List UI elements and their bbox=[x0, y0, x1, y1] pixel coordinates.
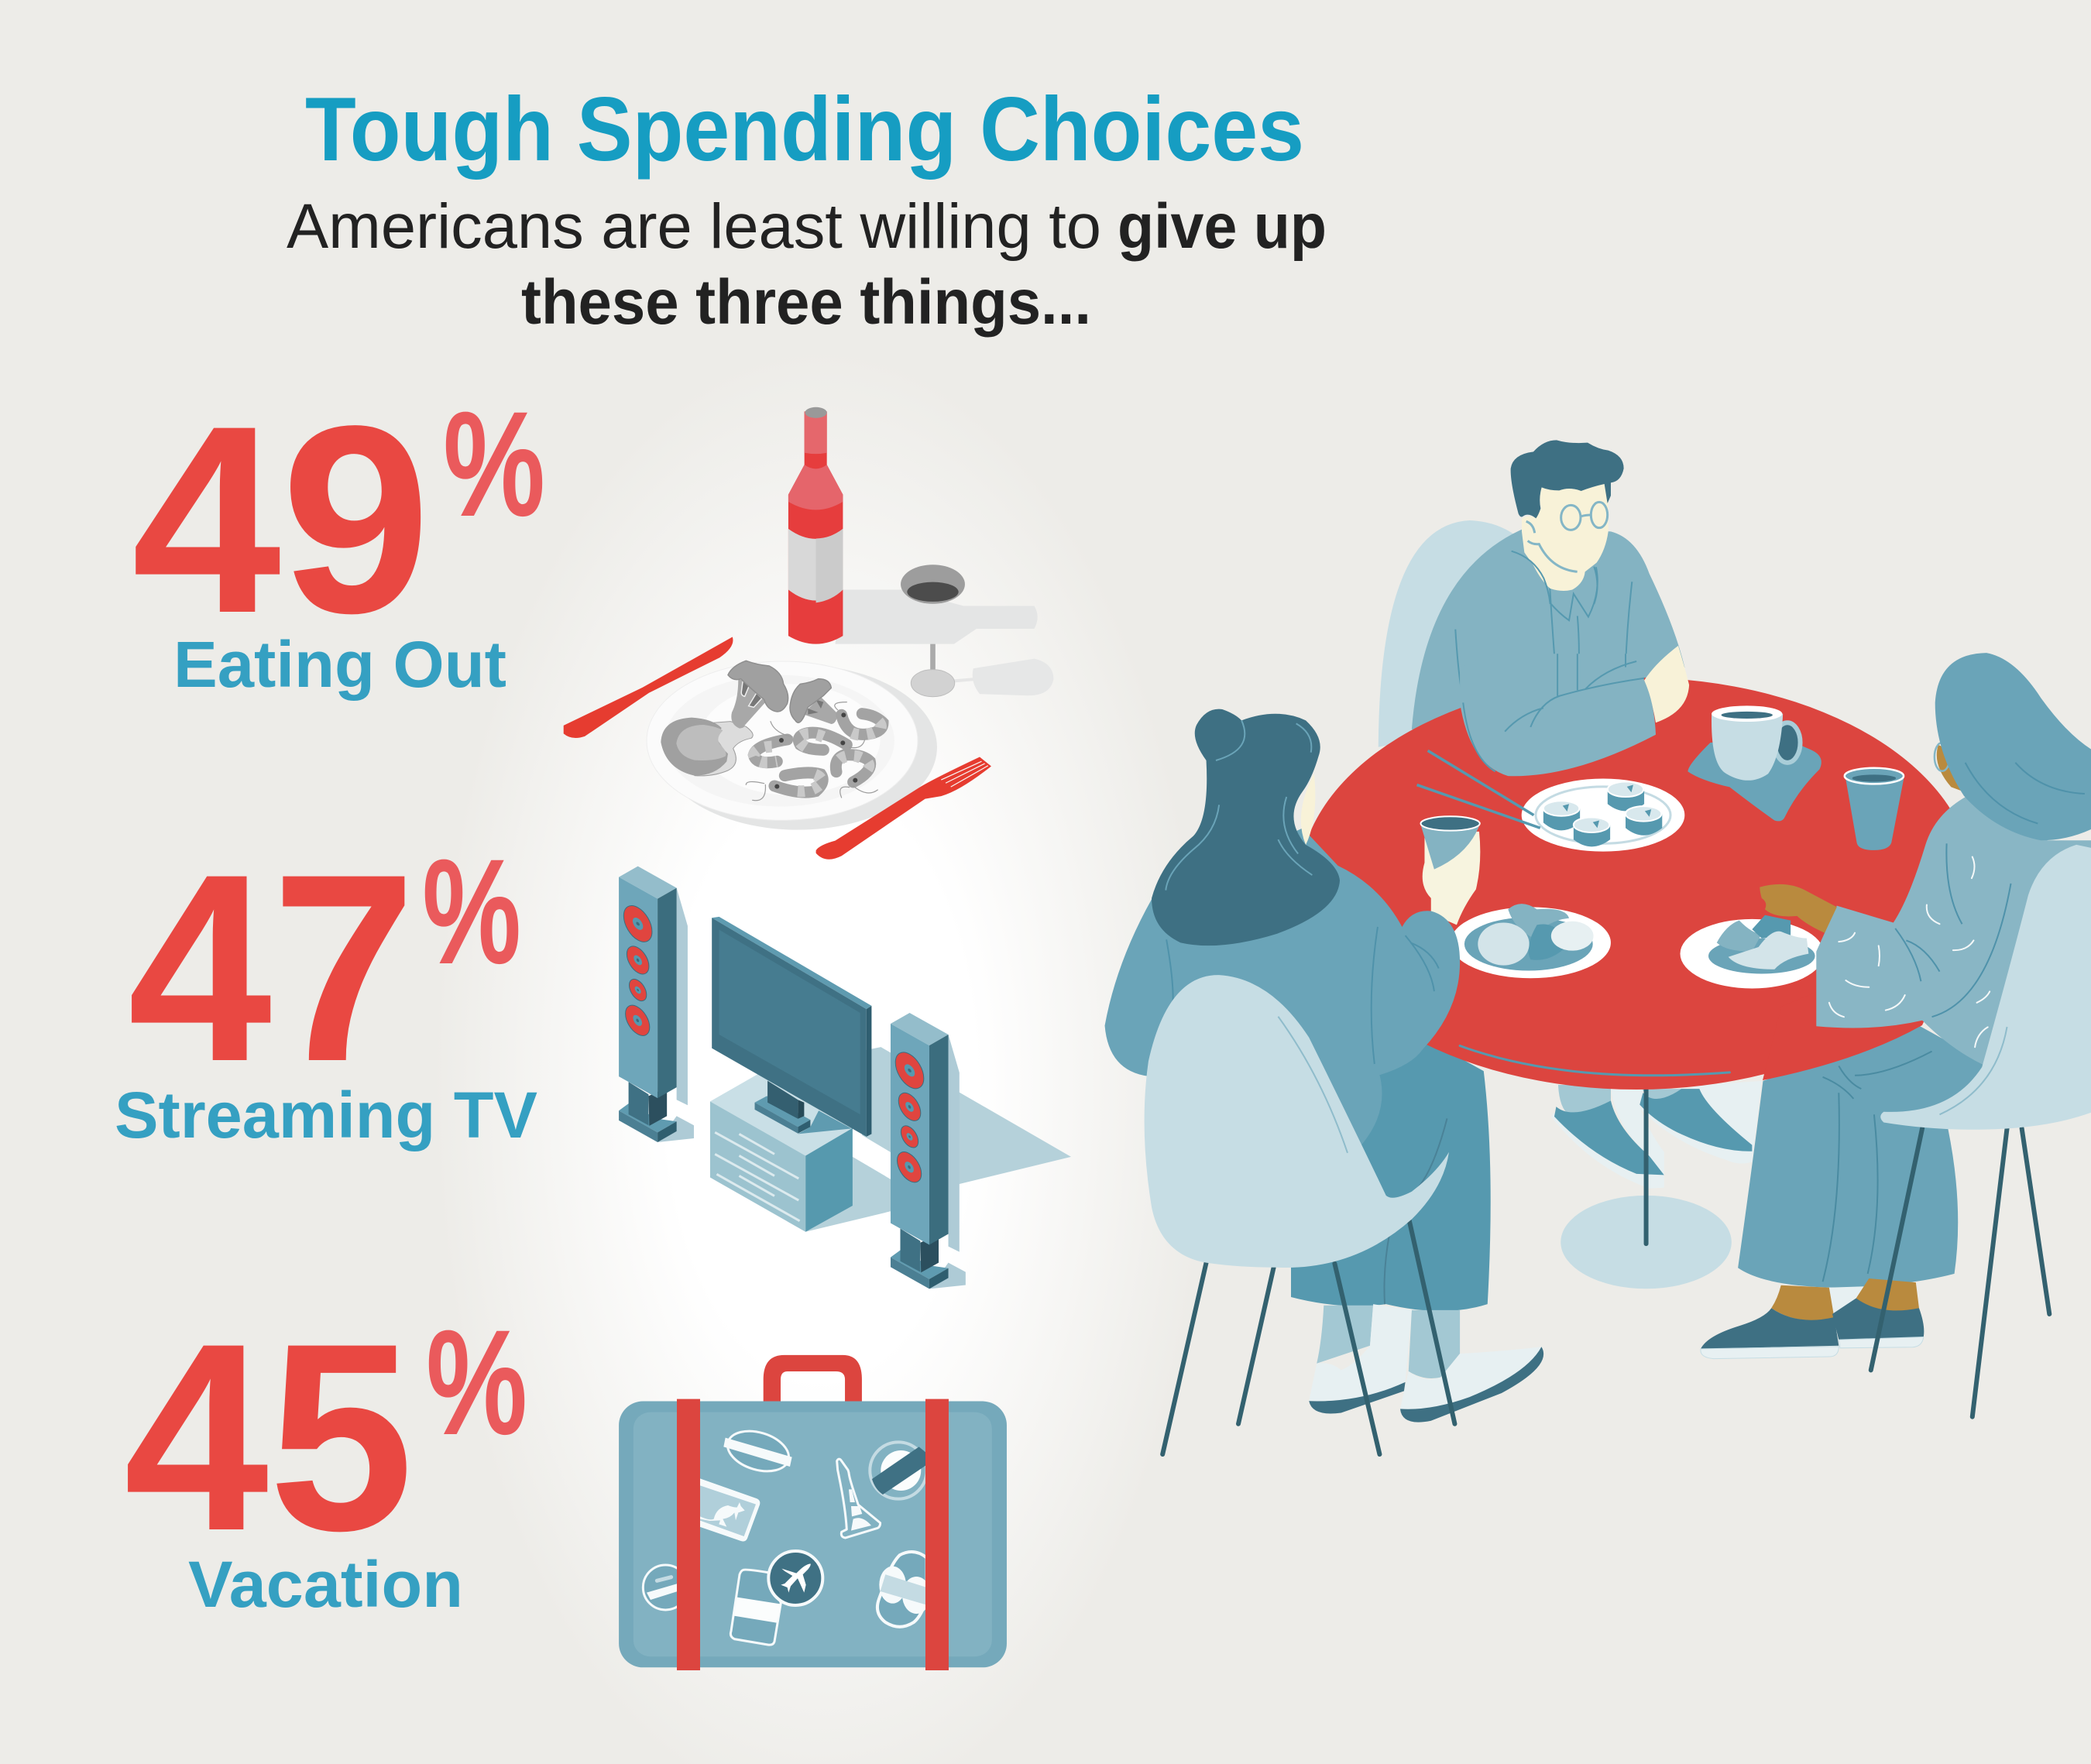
right person: head wrap bbox=[1935, 653, 2091, 840]
chair shell bbox=[1880, 845, 2091, 1130]
icon: wine bottle, glass and knife bbox=[564, 407, 1053, 738]
handle bbox=[764, 1355, 862, 1402]
stat: 49% eating out: 49 bbox=[132, 371, 431, 669]
broccoli bbox=[728, 661, 838, 729]
face bbox=[1522, 484, 1609, 591]
sticker: plane bbox=[768, 1551, 822, 1605]
man: chair back bbox=[1379, 520, 1515, 747]
wine glass bbox=[901, 565, 1053, 697]
woman: torso and sleeve bbox=[1105, 828, 1460, 1168]
stat: 45% vacation bbox=[124, 1289, 527, 1621]
sticker: pill bbox=[877, 1552, 931, 1627]
fork bbox=[816, 757, 991, 860]
icon: plate of shrimp, broccoli and oyster bbox=[647, 661, 937, 830]
subtitle: Americans are least willing to bbox=[287, 191, 1101, 262]
left speaker bbox=[619, 867, 694, 1142]
coaster bbox=[1688, 738, 1821, 821]
right person: chair bbox=[1871, 845, 2091, 1417]
table top bbox=[1300, 678, 1973, 1090]
subtitle: give up bbox=[1118, 191, 1327, 262]
woman: trousers bbox=[1291, 1010, 1491, 1311]
table edge line bbox=[1460, 1045, 1729, 1076]
straps bbox=[677, 1399, 949, 1670]
sticker: striped circle bbox=[870, 1442, 927, 1499]
stat: 45% vacation: % bbox=[427, 1303, 527, 1463]
knife bbox=[564, 637, 733, 738]
woman: hair and face bbox=[1152, 709, 1340, 945]
woman: forearm and cup bbox=[1420, 816, 1481, 925]
cup bbox=[1845, 768, 1904, 850]
right person: sweater bbox=[1816, 796, 2091, 1065]
mug bbox=[1712, 705, 1801, 781]
right person: socks and shoes bbox=[1701, 1278, 1924, 1359]
oyster bbox=[661, 718, 753, 776]
man: arm and hand on table bbox=[1460, 646, 1689, 776]
icon: suitcase bbox=[619, 1355, 1007, 1667]
right person: trousers bbox=[1738, 1025, 1983, 1288]
plate bbox=[647, 661, 937, 830]
man: torso bbox=[1412, 527, 1684, 738]
shrimps bbox=[746, 702, 883, 801]
sticker: left circle bbox=[643, 1565, 688, 1610]
sleeve bbox=[1460, 654, 1656, 776]
bottle shadow bbox=[835, 590, 1038, 644]
sticker: Eiffel tower bbox=[837, 1459, 881, 1538]
icon: TV and speakers bbox=[619, 867, 1071, 1289]
right person: hand bbox=[1760, 884, 1837, 933]
TV stand bbox=[755, 1081, 810, 1134]
woman: legs and shoes bbox=[1309, 1304, 1543, 1423]
table setting bbox=[1417, 705, 1904, 1076]
stat: 49% eating out: Eating Out bbox=[173, 628, 506, 701]
TV shadow bbox=[805, 1047, 1071, 1232]
woman: chair bbox=[1145, 975, 1454, 1454]
stat: 45% vacation: Vacation bbox=[188, 1548, 463, 1621]
wine bottle bbox=[788, 407, 843, 644]
sushi plate bbox=[1522, 779, 1684, 852]
chair legs bbox=[1162, 1217, 1454, 1454]
man: head bbox=[1511, 440, 1624, 604]
subtitle bbox=[287, 191, 1327, 338]
chair legs bbox=[1871, 1128, 2049, 1417]
stat: 47% streaming TV: 47 bbox=[128, 819, 416, 1117]
glasses and smile bbox=[1526, 502, 1608, 571]
sticker: oval with band bbox=[723, 1424, 794, 1478]
left dinner plate bbox=[1451, 904, 1611, 978]
stat: 49% eating out: % bbox=[444, 385, 544, 544]
hand bbox=[1644, 646, 1689, 722]
sticker: card bbox=[730, 1570, 781, 1645]
stat: 49% eating out bbox=[132, 371, 544, 701]
hair bbox=[1511, 440, 1624, 518]
right dinner plate bbox=[1680, 915, 1824, 988]
case bbox=[619, 1402, 1007, 1667]
stat: 47% streaming TV: Streaming TV bbox=[115, 1079, 537, 1151]
sticker: kangaroo bbox=[699, 1478, 760, 1542]
cabinet bbox=[710, 1071, 853, 1232]
chopsticks bbox=[1417, 750, 1540, 828]
stat: 45% vacation: 45 bbox=[124, 1289, 414, 1587]
chair shell bbox=[1145, 975, 1449, 1268]
subtitle: these three things... bbox=[521, 267, 1091, 338]
TV screen bbox=[712, 917, 871, 1137]
table base bbox=[1561, 1196, 1732, 1289]
suitcase stickers and straps bbox=[643, 1399, 949, 1670]
stat: 47% streaming TV: % bbox=[423, 832, 520, 992]
man: legs and shoes bbox=[1551, 1081, 1762, 1189]
right speaker bbox=[891, 1013, 966, 1289]
title: Tough Spending Choices bbox=[305, 78, 1304, 180]
stat: 47% streaming TV bbox=[115, 819, 537, 1151]
table pole bbox=[1644, 1085, 1649, 1244]
